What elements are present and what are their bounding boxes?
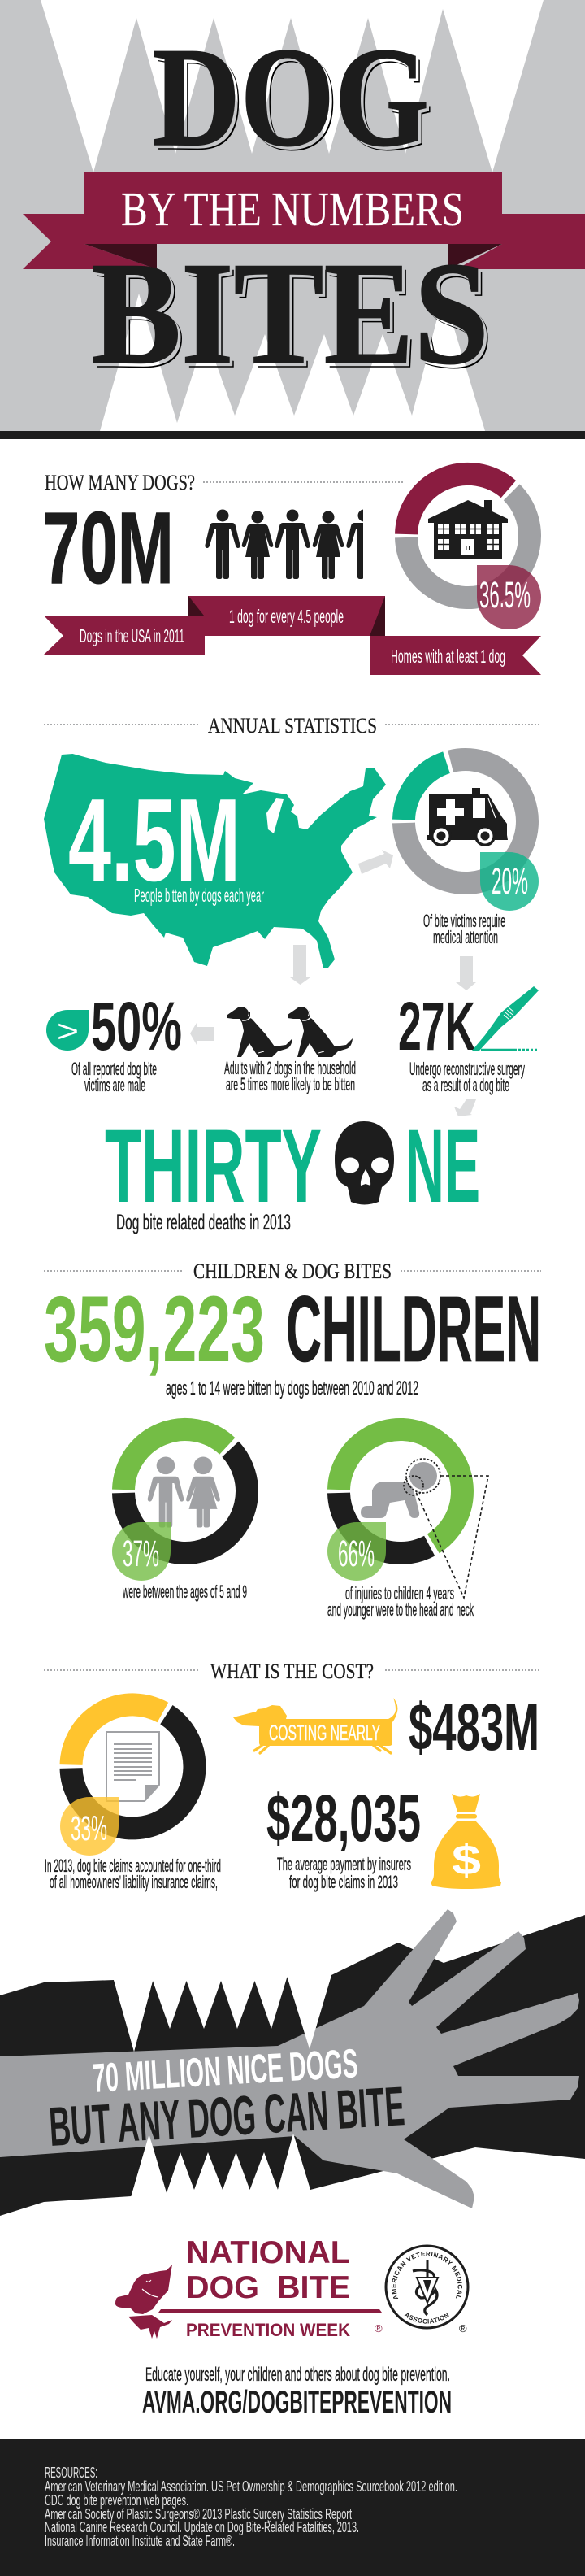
donut: claims bbox=[72, 1704, 194, 1828]
logo name line 3: PREVENTION WEEK bbox=[186, 2320, 350, 2340]
callout: 33%: 33% bbox=[71, 1809, 107, 1848]
stat: 50%: 50% bbox=[91, 988, 182, 1064]
seal text bottom: ASSOCIATION bbox=[405, 2313, 449, 2324]
header base bar bbox=[0, 431, 585, 439]
panel: cost bbox=[44, 1660, 541, 1892]
heading: CHILDREN & DOG BITES bbox=[193, 1260, 392, 1283]
panel: children: were between the ages of 5 and 9 bbox=[123, 1582, 247, 1602]
callout: greater than icon bbox=[46, 1010, 89, 1051]
caption: male victims: victims are male bbox=[84, 1075, 145, 1095]
caption: male victims bbox=[72, 1059, 157, 1095]
callout: 36.5%: 36.5% bbox=[479, 574, 531, 616]
heading: WHAT IS THE COST? bbox=[210, 1660, 374, 1683]
donut: medical attention bbox=[404, 759, 527, 883]
logo name line 1: NATIONAL bbox=[186, 2235, 350, 2270]
icon: house bbox=[428, 500, 508, 559]
header background bbox=[0, 0, 585, 431]
caption: bite victims bbox=[423, 911, 505, 947]
resources text bbox=[45, 2465, 457, 2549]
panel: cost: In 2013, dog bite claims accounted for one-third bbox=[45, 1856, 221, 1876]
top white zigzag bbox=[41, 0, 544, 172]
ribbon bbox=[23, 172, 585, 269]
hand and arm bbox=[0, 1909, 579, 2208]
ribbon: dog per people bbox=[188, 596, 385, 636]
callout: 33% bbox=[60, 1797, 119, 1856]
icon: dachshund bbox=[233, 1698, 397, 1753]
logo: national dog bite prevention week bbox=[115, 2235, 383, 2340]
callout: 36.5% bbox=[477, 565, 541, 629]
callout: 66%: 66% bbox=[338, 1533, 375, 1574]
resources text: CDC dog bite prevention web pages. bbox=[45, 2492, 188, 2509]
icon: people bbox=[205, 509, 363, 579]
ribbon: dog per people: 1 dog for every 4.5 people bbox=[229, 606, 344, 627]
panel: resources footer bbox=[0, 2439, 585, 2576]
donut: ages 5 to 9 bbox=[124, 1429, 247, 1553]
resources text: National Canine Research Council. Update on Dog Bite-Related Fatalities, 2013. bbox=[45, 2519, 359, 2535]
panel: annual statistics: People bitten by dogs each year bbox=[134, 885, 264, 906]
callout: 20% bbox=[480, 852, 539, 911]
logo name line 2: DOG BITE bbox=[186, 2270, 350, 2305]
caption: bite victims: medical attention bbox=[433, 927, 498, 947]
donut: homes bbox=[406, 474, 530, 598]
panel: bite graphic bbox=[0, 1909, 585, 2216]
caption: claims bbox=[45, 1856, 221, 1892]
panel: header bbox=[0, 0, 585, 439]
callout: 20%: 20% bbox=[492, 860, 528, 902]
stat: 28,035: $28,035 bbox=[266, 1782, 421, 1856]
icon: money bag bbox=[431, 1794, 501, 1889]
long teeth bbox=[114, 1975, 332, 2196]
panel: children bbox=[44, 1260, 541, 1620]
caption: surgery bbox=[410, 1059, 525, 1095]
panel: how many dogs bbox=[42, 471, 541, 675]
caption: average payment: The average payment by insurers bbox=[277, 1854, 411, 1874]
logo rule bbox=[158, 2309, 382, 2313]
heading: HOW MANY DOGS? bbox=[45, 471, 195, 494]
bottom white zigzag bbox=[100, 294, 485, 431]
icon: scalpel bbox=[472, 986, 539, 1051]
icon: two dogs bbox=[228, 1007, 353, 1057]
ribbon: homes bbox=[370, 636, 541, 675]
donut: head and neck bbox=[339, 1429, 462, 1553]
callout: 37%: 37% bbox=[123, 1533, 159, 1574]
resources text: RESOURCES: bbox=[45, 2465, 98, 2481]
caption: deaths: Dog bite related deaths in 2013 bbox=[116, 1210, 291, 1234]
title: bites: BITES bbox=[91, 233, 489, 395]
caption: injuries: of injuries to children 4 years bbox=[345, 1583, 454, 1603]
registered mark: ® bbox=[459, 2322, 467, 2334]
label: costing nearly: COSTING NEARLY bbox=[269, 1721, 380, 1745]
caption: average payment: for dog bite claims in 2013 bbox=[289, 1872, 398, 1892]
icon: money bag: $ bbox=[452, 1837, 481, 1884]
stat: ne: NE bbox=[405, 1108, 480, 1225]
resources text: American Society of Plastic Surgeons® 2013 Plastic Surgery Statistics Report bbox=[45, 2506, 352, 2522]
arrows bbox=[190, 850, 476, 1116]
registered mark: ® bbox=[375, 2322, 383, 2334]
heading: ANNUAL STATISTICS bbox=[208, 714, 377, 738]
callout: greater than icon: > bbox=[57, 1015, 79, 1049]
callout: 37% bbox=[112, 1522, 171, 1581]
caption: two dogs bbox=[224, 1058, 356, 1094]
panel: cost: of all homeowners’ liability insurance claims, bbox=[50, 1872, 218, 1892]
panel: logos bbox=[115, 2235, 470, 2420]
resources text: Insurance Information Institute and State Farm®. bbox=[45, 2533, 235, 2549]
caption: injuries bbox=[327, 1583, 474, 1620]
stat: 4.5M: 4.5M bbox=[68, 774, 240, 906]
seal text top: AMERICAN VETERINARY MEDICAL bbox=[392, 2251, 463, 2299]
panel: annual statistics: Adults with 2 dogs in the household bbox=[224, 1058, 356, 1078]
stat: children count: 359,223 bbox=[44, 1277, 265, 1382]
panel: annual statistics: are 5 times more likely to be bitten bbox=[226, 1074, 355, 1094]
icon: ambulance bbox=[427, 788, 508, 846]
logo dog head bbox=[115, 2265, 172, 2314]
dog jaw bbox=[0, 1915, 585, 2216]
ribbon: dogs in usa: Dogs in the USA in 2011 bbox=[80, 625, 184, 646]
subtitle: by the numbers: BY THE NUMBERS bbox=[121, 182, 464, 236]
title: dog: DOG bbox=[153, 18, 429, 176]
stat: 70M: 70M bbox=[42, 492, 174, 605]
stat: 27K: 27K bbox=[398, 988, 475, 1064]
logo dog body bbox=[128, 2315, 172, 2339]
icon: crawling baby bbox=[361, 1459, 488, 1598]
map: usa bbox=[44, 754, 386, 968]
stat: thirty: THIRTY bbox=[105, 1108, 322, 1225]
ribbon: dogs in usa bbox=[44, 616, 205, 655]
seal emblem bbox=[413, 2260, 438, 2315]
slogan line 1: 70 MILLION NICE DOGS bbox=[91, 2040, 359, 2101]
icon: document bbox=[106, 1732, 159, 1801]
icon: skull bbox=[335, 1121, 394, 1205]
callout: 66% bbox=[327, 1522, 386, 1581]
caption: average payment bbox=[277, 1854, 411, 1892]
panel: annual statistics: Of all reported dog bite bbox=[72, 1059, 157, 1079]
icon: children bbox=[148, 1457, 220, 1528]
panel: annual statistics bbox=[44, 714, 541, 1234]
logo: avma seal bbox=[385, 2244, 470, 2329]
